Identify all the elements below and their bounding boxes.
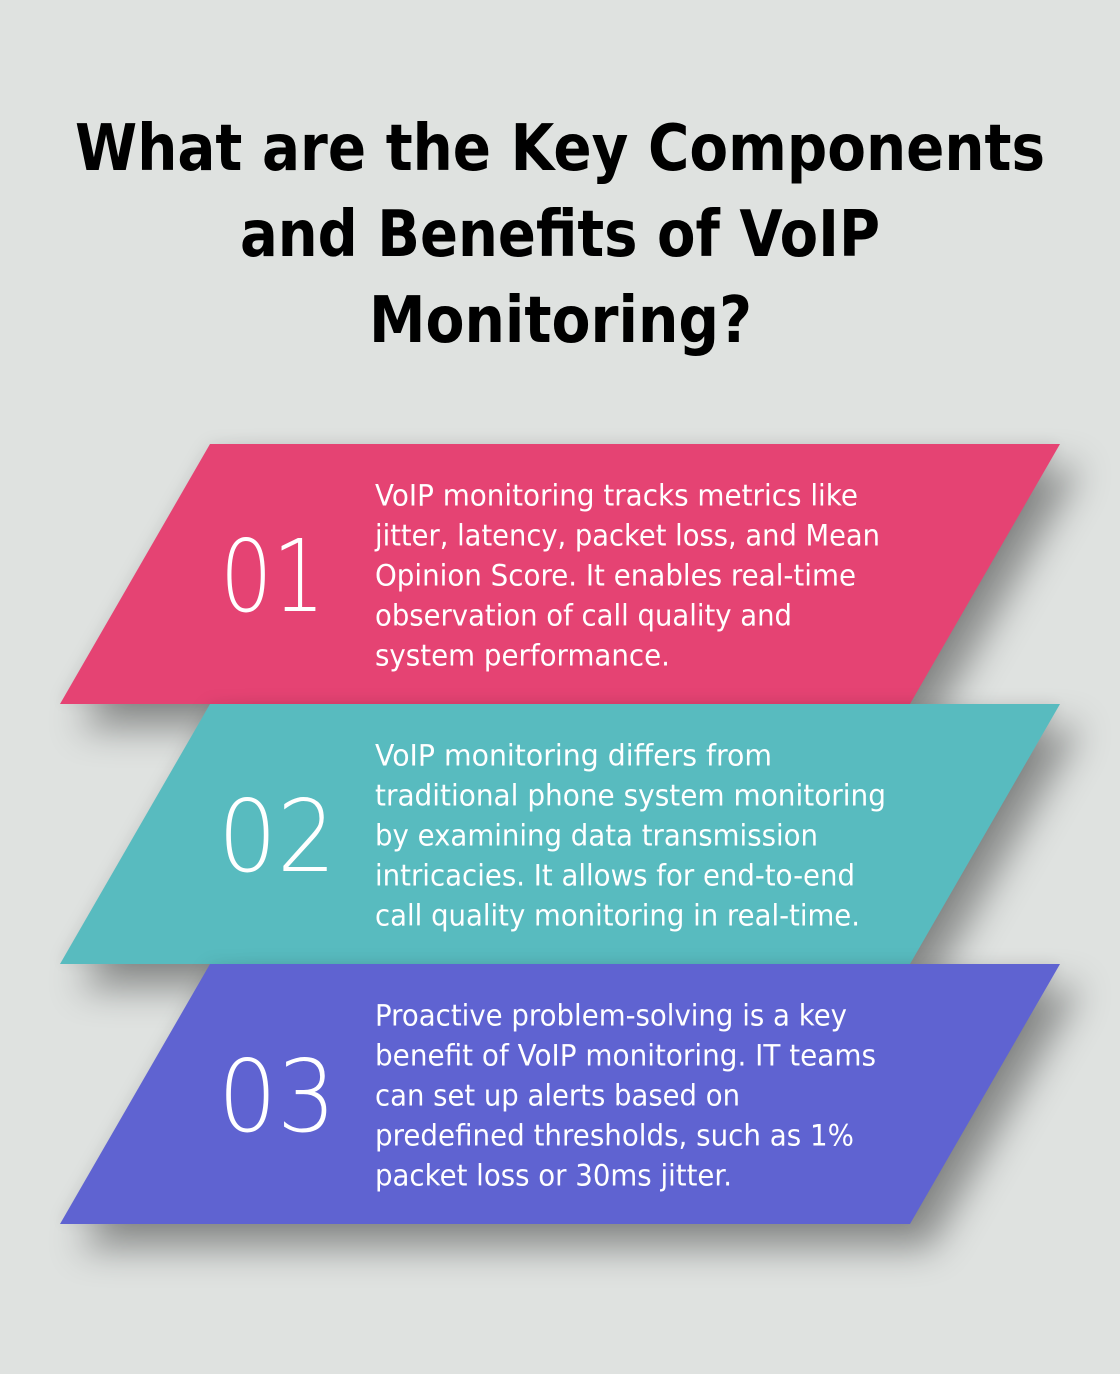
number 02: 02 (218, 778, 336, 895)
title: and Benefits of VoIP (240, 198, 880, 272)
body text: step 02: intricacies. It allows for end-to-end (375, 858, 855, 892)
panel: step 03 (60, 964, 1060, 1224)
body text: step 02: VoIP monitoring differs from (375, 738, 772, 772)
body text: step 02 (375, 738, 886, 932)
title: Monitoring? (369, 284, 752, 358)
number 01: 01 (220, 518, 325, 635)
indigo parallelogram (60, 964, 1060, 1224)
panel: step 02 (60, 704, 1060, 964)
body text: step 01: VoIP monitoring tracks metrics like (375, 478, 858, 512)
body text: step 01: Opinion Score. It enables real-time (375, 558, 856, 592)
body text: step 03: Proactive problem-solving is a key (375, 998, 847, 1032)
body text: step 02: call quality monitoring in real-time. (375, 898, 860, 932)
body text: step 03: can set up alerts based on (375, 1078, 740, 1112)
body text: step 03 (375, 998, 876, 1192)
body text: step 03: predefined thresholds, such as 1% (375, 1118, 854, 1152)
number 03: 03 (218, 1038, 336, 1155)
pink parallelogram (60, 444, 1060, 704)
body text: step 02: by examining data transmission (375, 818, 818, 852)
body text: step 01: system performance. (375, 638, 670, 672)
title (75, 112, 1045, 358)
body text: step 01 (374, 478, 880, 672)
body text: step 03: packet loss or 30ms jitter. (375, 1158, 732, 1192)
body text: step 03: benefit of VoIP monitoring. IT teams (375, 1038, 876, 1072)
teal parallelogram (60, 704, 1060, 964)
body text: step 01: observation of call quality and (375, 598, 792, 632)
body text: step 01: jitter, latency, packet loss, and Mean (374, 518, 880, 552)
panel: step 01 (60, 444, 1060, 704)
body text: step 02: traditional phone system monitoring (375, 778, 886, 812)
